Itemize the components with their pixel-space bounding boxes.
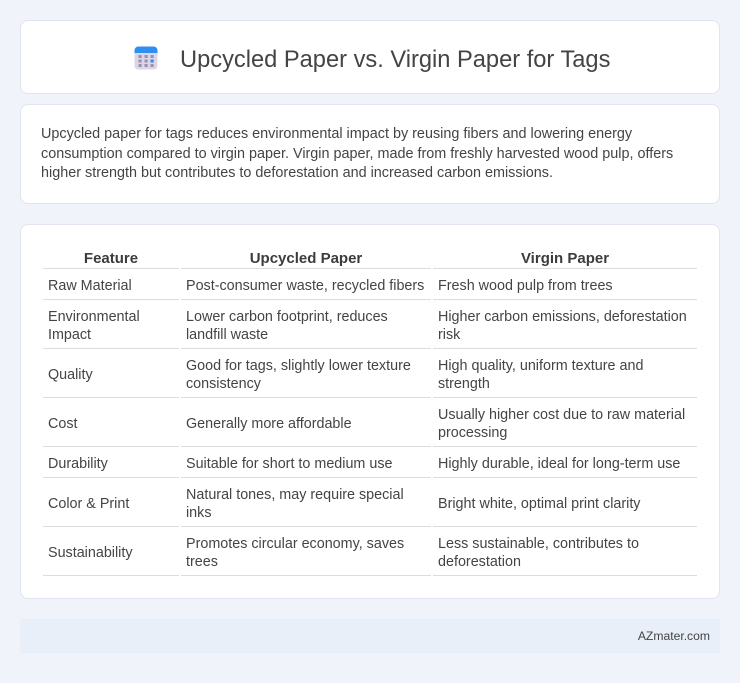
comparison table: Promotes circular economy, saves: [186, 536, 404, 552]
comparison table: Bright white, optimal print clarity: [438, 496, 640, 512]
comparison table: strength: [438, 376, 490, 392]
comparison table: processing: [438, 425, 507, 441]
row: Raw Material: [48, 278, 613, 294]
column heading: Feature: Feature: [84, 250, 138, 267]
comparison table: Suitable for short to medium use: [186, 456, 392, 472]
comparison table: Quality: [48, 367, 93, 383]
comparison table: Environmental: [48, 309, 140, 325]
header panel: [20, 20, 720, 94]
comparison table: Color & Print: [48, 496, 129, 512]
comparison table: deforestation: [438, 554, 521, 570]
intro text: higher strength but contributes to deforestation and increased carbon emissions.: [41, 165, 553, 181]
comparison table: Lower carbon footprint, reduces: [186, 309, 388, 325]
comparison table: Sustainability: [48, 545, 133, 561]
intro panel: [20, 104, 720, 204]
comparison table: Durability: [48, 456, 108, 472]
comparison table: inks: [186, 505, 212, 521]
comparison table: Impact: [48, 327, 91, 343]
comparison table: landfill waste: [186, 327, 268, 343]
comparison table: Raw Material: [48, 278, 132, 294]
footer credit: AZmater.com: [638, 629, 710, 643]
comparison table panel: [20, 224, 720, 599]
comparison table: Good for tags, slightly lower texture: [186, 358, 411, 374]
comparison table: Highly durable, ideal for long-term use: [438, 456, 680, 472]
footer bar: [20, 619, 720, 653]
comparison table: consistency: [186, 376, 261, 392]
comparison table: Usually higher cost due to raw material: [438, 407, 685, 423]
intro text: [41, 126, 673, 181]
intro text: consumption compared to virgin paper. Virgin paper, made from freshly harvested wood pulp, offers: [41, 146, 673, 162]
comparison table: Post-consumer waste, recycled fibers: [186, 278, 424, 294]
comparison table: Higher carbon emissions, deforestation: [438, 309, 687, 325]
comparison table: Natural tones, may require special: [186, 487, 404, 503]
comparison table: Generally more affordable: [186, 416, 352, 432]
row: Cost: [48, 407, 685, 441]
column heading: Upcycled Paper: Upcycled Paper: [250, 250, 362, 267]
comparison table: risk: [438, 327, 460, 343]
row: Environmental Impact: [48, 309, 687, 343]
intro text: Upcycled paper for tags reduces environmental impact by reusing fibers and lowering energy: [41, 126, 632, 142]
row: Durability: [48, 456, 680, 472]
icon: calendar: [134, 46, 158, 70]
comparison table: trees: [186, 554, 218, 570]
comparison table: Fresh wood pulp from trees: [438, 278, 613, 294]
comparison table: Cost: [48, 416, 78, 432]
title: Upcycled Paper vs. Virgin Paper for Tags: [180, 47, 610, 73]
comparison table: Less sustainable, contributes to: [438, 536, 639, 552]
comparison table: High quality, uniform texture and: [438, 358, 643, 374]
column heading: Virgin Paper: Virgin Paper: [521, 250, 609, 267]
row: Color & Print: [48, 487, 640, 521]
row: Sustainability: [48, 536, 639, 570]
row: Quality: [48, 358, 643, 392]
